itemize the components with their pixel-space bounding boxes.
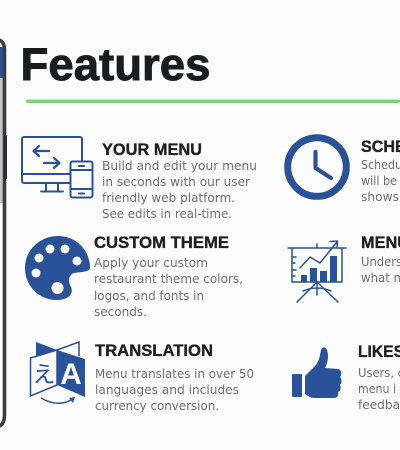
- description: [102, 158, 257, 221]
- description: in seconds with our user: [102, 174, 251, 189]
- icon: palette: [25, 236, 90, 300]
- feature: translation: [30, 342, 254, 413]
- title: Features: [20, 39, 210, 90]
- icon: clock: [288, 138, 346, 196]
- feature: schedule: [288, 138, 400, 204]
- description: Apply your custom: [94, 255, 208, 270]
- icon: presentation chart: [288, 241, 346, 302]
- description: Menu translates in over 50: [95, 366, 254, 381]
- description: [95, 366, 254, 413]
- description: [361, 157, 400, 204]
- heading: TRANSLATION: [95, 342, 213, 360]
- description: shows: [361, 189, 399, 204]
- description: friendly web platform.: [102, 190, 235, 205]
- title underline: [26, 100, 400, 103]
- heading: YOUR MENU: [102, 141, 202, 159]
- description: seconds.: [94, 304, 147, 319]
- icon: monitor and phone: [22, 137, 92, 198]
- heading: CUSTOM THEME: [94, 234, 229, 252]
- phone mockup edge: [0, 40, 7, 426]
- description: languages and includes: [95, 382, 239, 397]
- feature: your menu: [22, 137, 257, 221]
- description: Build and edit your menu: [102, 158, 257, 173]
- description: See edits in real-time.: [102, 206, 232, 221]
- feature: menu analytics: [288, 234, 400, 302]
- feature: likes: [292, 343, 400, 412]
- description: [358, 365, 400, 412]
- description: currency conversion.: [95, 398, 219, 413]
- description: restaurant theme colors,: [94, 271, 243, 286]
- description: [361, 254, 400, 285]
- icon: translation book: A: [60, 358, 82, 391]
- description: logos, and fonts in: [94, 288, 204, 303]
- description: [94, 255, 243, 319]
- icon: translation book: [30, 342, 85, 403]
- icon: thumbs up: [292, 347, 342, 398]
- icon: translation book: え: [32, 355, 56, 389]
- feature: custom theme: [25, 234, 243, 319]
